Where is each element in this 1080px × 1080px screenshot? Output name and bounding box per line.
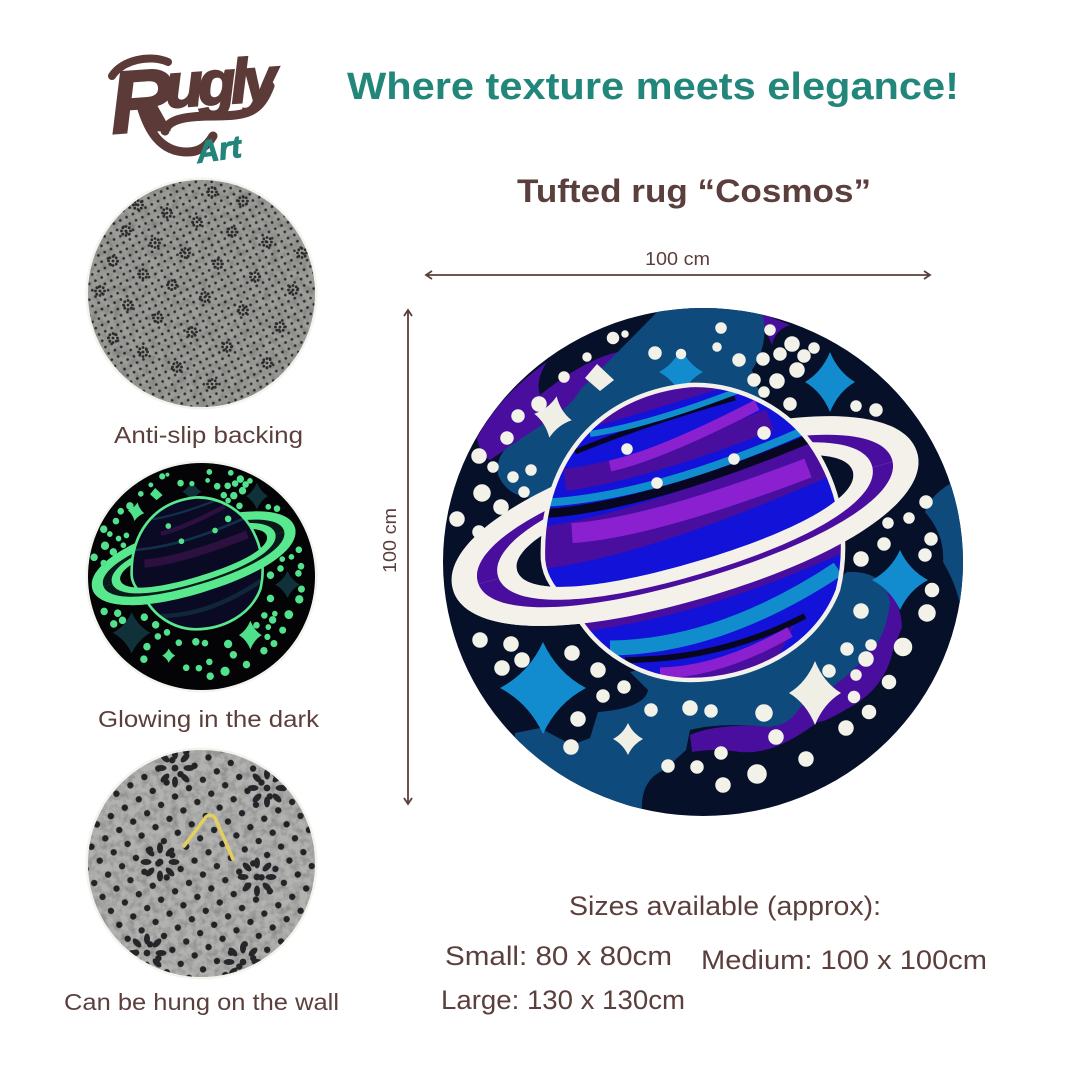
caption: glowing in the dark: Glowing in the dark [98,706,320,732]
icon: brass hanging hook [184,815,233,859]
logo: Rugly Art: R [107,49,176,152]
light blue stars [500,348,928,734]
ring back part [452,416,918,626]
purple cloud upper left [477,350,628,460]
height arrow [404,310,412,804]
headline: Where texture meets elegance! [347,66,959,108]
caption: can be hung on the wall: Can be hung on the wall [64,989,339,1015]
size: small: Small: 80 x 80cm [445,941,672,971]
teal cloud upper [498,306,764,500]
ring front part [454,454,918,626]
panel: wall hanging hook photo [86,748,318,982]
panel: anti-slip backing photo [86,178,318,410]
sizes heading: Sizes available (approx): [569,891,881,921]
product title: Tufted rug “Cosmos” [517,173,871,209]
white stars [531,364,841,755]
caption: anti-slip backing: Anti-slip backing [114,422,303,448]
panel: glowing in the dark photo [83,460,318,692]
purple cloud top [758,312,790,345]
planet outline [543,385,843,680]
logo: Rugly Art [107,42,285,170]
size: large: Large: 130 x 130cm [441,985,685,1015]
teal cloud right [925,484,963,603]
rug dots [450,323,938,792]
logo: Rugly Art: Art [193,129,245,170]
width arrow [426,271,930,279]
planet body [545,387,841,678]
width label: 100 cm [645,249,710,269]
purple cloud lower [690,572,902,752]
panel: main rug Cosmos [431,300,975,820]
size: medium: Medium: 100 x 100cm [701,945,987,975]
teal cloud lower [515,572,890,812]
logo: Rugly Art: ugly [163,45,283,122]
height label: 100 cm [380,508,400,573]
